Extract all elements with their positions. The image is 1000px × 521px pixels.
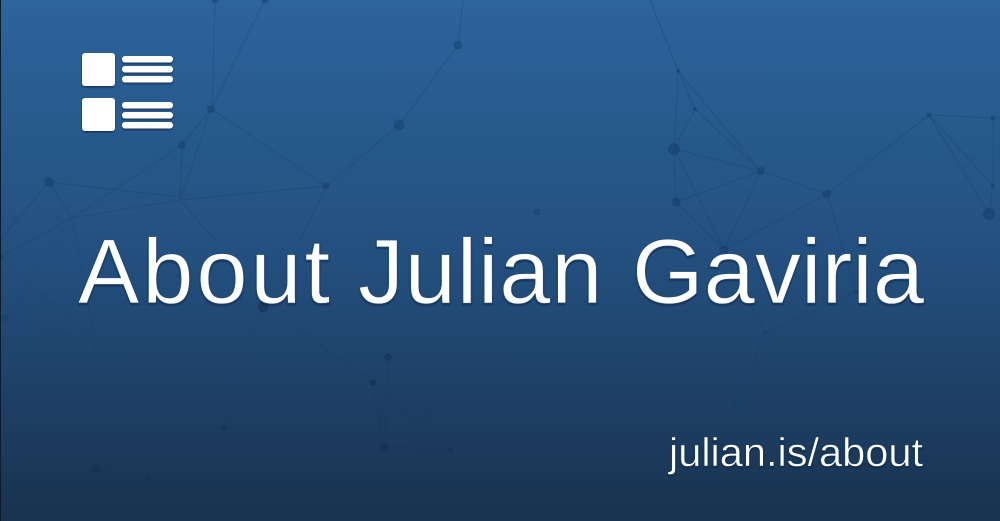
network pattern: lower left	[44, 302, 452, 490]
icon: list of articles	[82, 53, 173, 131]
network pattern: upper left	[0, 0, 540, 488]
url: julian.is/about	[668, 431, 923, 475]
title: Julian	[358, 221, 603, 323]
left edge line	[0, 0, 1, 521]
title: Gaviria	[632, 221, 925, 323]
title: About	[78, 221, 333, 323]
network pattern: right	[650, 0, 995, 410]
